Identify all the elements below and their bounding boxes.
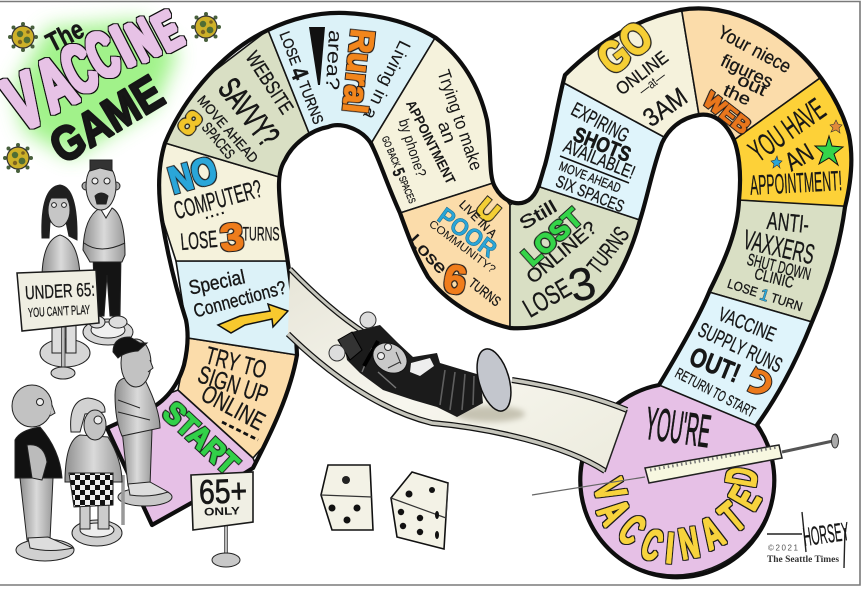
figure: man in cap xyxy=(113,337,172,506)
finish circle text: Vaccinated: A xyxy=(588,491,640,533)
finish circle text: Vaccinated: I xyxy=(664,523,676,573)
cell: special connections: Connections? xyxy=(191,278,289,322)
finish circle text: Vaccinated: C xyxy=(609,505,655,555)
icon: return arrow xyxy=(747,366,772,394)
cell: rural xyxy=(271,27,415,129)
cell: poor community: POOR xyxy=(432,203,502,263)
finish circle text: Vaccinated: A xyxy=(693,507,731,559)
shirt xyxy=(410,358,434,376)
cell: your niece xyxy=(699,22,794,139)
cell: anti-vaxxers xyxy=(725,207,818,316)
icon: virus top right xyxy=(191,12,221,42)
cell: website savvy: MOVE AHEAD xyxy=(194,92,262,166)
cell: still lost online: TURNS xyxy=(582,222,634,278)
icon: orange star xyxy=(830,120,842,133)
cell: expiring shots: EXPIRING xyxy=(567,99,633,147)
cell: expiring shots: SHOTS xyxy=(570,123,634,167)
sign: under 65: YOU CAN'T PLAY xyxy=(28,302,91,320)
sign: 65+ only: ONLY xyxy=(204,505,241,519)
figure: older woman xyxy=(65,398,123,546)
dice xyxy=(321,465,448,549)
cell: expiring shots: MOVE AHEAD xyxy=(557,158,623,196)
cell: no computer: LOSE xyxy=(179,226,219,256)
signature and credit xyxy=(767,512,851,568)
face xyxy=(367,337,413,379)
cell: try to sign up online: SIGN UP xyxy=(194,361,272,409)
cell: website savvy xyxy=(172,48,297,166)
cell: anti-vaxxers: CLINIC xyxy=(753,266,795,292)
green glow xyxy=(14,20,178,158)
game board: YOU'RE xyxy=(642,397,714,457)
cell: your niece: the xyxy=(720,80,754,110)
finish circle text: Vaccinated: D xyxy=(716,464,768,490)
cell: poor community: Lose xyxy=(405,230,451,278)
cell: website savvy: WEBSITE xyxy=(241,48,297,118)
cell: still lost online: LOST xyxy=(516,202,588,272)
title: Vaccine: A xyxy=(23,40,87,128)
cell: your niece: out xyxy=(734,70,770,100)
cell: anti-vaxxers: ANTI- xyxy=(766,207,810,239)
cell: no computer: NO xyxy=(164,149,222,203)
cell: expiring shots: SIX SPACES xyxy=(553,172,627,216)
signature and credit: The Seattle Times xyxy=(767,555,839,565)
icon: green star xyxy=(815,136,843,165)
cell: you have an appointment: AN xyxy=(779,137,819,177)
figure: young man xyxy=(82,160,133,345)
syringe xyxy=(532,434,838,495)
cell: poor community: 6 xyxy=(440,256,470,304)
cell: trying to make an appointment: by phone? xyxy=(395,117,429,179)
cell: expiring shots xyxy=(553,99,638,216)
slide rims xyxy=(290,269,365,333)
cell: go online: —at— xyxy=(636,68,668,98)
cell: go online xyxy=(588,12,693,133)
cell: trying to make an appointment: APPOINTMENT xyxy=(403,97,459,187)
cell: still lost online: LOSE xyxy=(518,273,576,323)
cell: vaccine supply runs out: VACCINE xyxy=(715,304,779,346)
cell: still lost online: 3 xyxy=(563,256,601,312)
cell: rural: Living in a xyxy=(359,37,415,124)
cell: special connections: Special xyxy=(187,266,247,300)
cell: poor community: TURNS xyxy=(466,275,504,309)
finish circle text: Vaccinated: E xyxy=(720,479,770,517)
figure: young woman xyxy=(40,185,90,367)
cell: vaccine supply runs out: OUT! xyxy=(685,341,745,389)
title: Vaccine: I xyxy=(102,14,144,80)
hands xyxy=(360,312,376,328)
sign: 65+ only: 65+ xyxy=(198,472,248,512)
cell: no computer: TURNS xyxy=(242,224,280,246)
cell: your niece: Your niece xyxy=(714,22,794,78)
title: Vaccine xyxy=(0,1,191,148)
finish circle text: Vaccinated: T xyxy=(710,493,754,541)
cell: rural: Rural xyxy=(335,27,381,115)
cell: anti-vaxxers: SHUT DOWN xyxy=(745,250,813,284)
figure: man sliding xyxy=(329,312,517,417)
cell: trying to make an appointment: Trying to make xyxy=(433,67,487,173)
icon: yellow arrow xyxy=(218,304,288,333)
cell: rural: LOSE 4 TURNS xyxy=(271,27,331,129)
icon: teal star xyxy=(771,156,782,168)
cell: still lost online: ONLINE? xyxy=(523,218,601,288)
cell: trying to make an appointment: an xyxy=(434,118,460,146)
cell: try to sign up online xyxy=(194,341,272,440)
cell: no computer: COMPUTER? xyxy=(171,175,265,225)
cell: your niece: WEB xyxy=(699,87,755,139)
title: The: The xyxy=(41,14,89,58)
cell: your niece: figures xyxy=(718,50,776,92)
cell: website savvy: SAVVY? xyxy=(211,71,287,153)
figure: bald man xyxy=(12,385,74,561)
cell: website savvy: SPACES xyxy=(198,119,238,163)
cell: try to sign up online: ONLINE xyxy=(196,380,270,436)
sign: under 65: UNDER 65: xyxy=(24,280,96,304)
cell: anti-vaxxers: LOSE 1 TURN xyxy=(725,274,805,316)
slide xyxy=(288,268,627,472)
cell: you have an appointment xyxy=(742,91,843,201)
cell: poor community: COMMUNITY? xyxy=(426,218,498,276)
cell: still lost online xyxy=(516,196,634,323)
cell: expiring shots: AVAILABLE! xyxy=(560,136,638,184)
cell: go online: 3AM xyxy=(637,81,693,133)
cell: trying to make an appointment: GO BACK 5 SPACES xyxy=(375,133,421,207)
cell: vaccine supply runs out: SUPPLY RUNS xyxy=(694,319,786,377)
finish circle text: Vaccinated xyxy=(584,464,770,573)
die one xyxy=(321,465,373,530)
cell: vaccine supply runs out: RETURN TO START xyxy=(672,365,758,421)
cell: website savvy: 8 xyxy=(172,103,208,143)
cell: trying to make an appointment xyxy=(375,67,487,207)
signature and credit: ©2021 xyxy=(768,544,799,552)
cell: poor community: U xyxy=(470,192,506,228)
cell: start: START xyxy=(156,395,246,482)
finish circle text: Vaccinated: C xyxy=(635,519,669,571)
shoe xyxy=(471,345,517,415)
title: Game: GAME xyxy=(41,66,173,174)
die two xyxy=(391,472,448,549)
icon: virus top left xyxy=(8,22,38,52)
sign: 65+ only xyxy=(191,472,253,567)
cell: rural: area? xyxy=(321,29,345,91)
cell: special connections xyxy=(187,266,289,333)
cell: go online: GO xyxy=(588,12,662,84)
finish circle text: Vaccinated: N xyxy=(675,517,703,569)
sign: under 65 xyxy=(17,270,99,379)
title: Vaccine: C xyxy=(49,28,109,110)
cell: no computer: 3 xyxy=(218,216,246,260)
finish circle text: Vaccinated: V xyxy=(584,473,636,507)
cell: still lost online: Still xyxy=(516,196,560,234)
top hat xyxy=(338,332,362,360)
cell: go online: ONLINE xyxy=(612,47,672,99)
cell: poor community xyxy=(405,192,506,309)
cell: poor community: LIVE IN A xyxy=(456,197,500,241)
cell: vaccine supply runs out xyxy=(672,304,786,421)
title: Vaccine: N xyxy=(118,6,168,74)
cell: no computer xyxy=(164,149,280,260)
title block xyxy=(0,1,221,174)
icon: virus left xyxy=(3,143,33,173)
title: Vaccine: C xyxy=(75,17,131,95)
title: Vaccine: E xyxy=(145,1,191,63)
cell: try to sign up online: TRY TO xyxy=(202,341,270,385)
